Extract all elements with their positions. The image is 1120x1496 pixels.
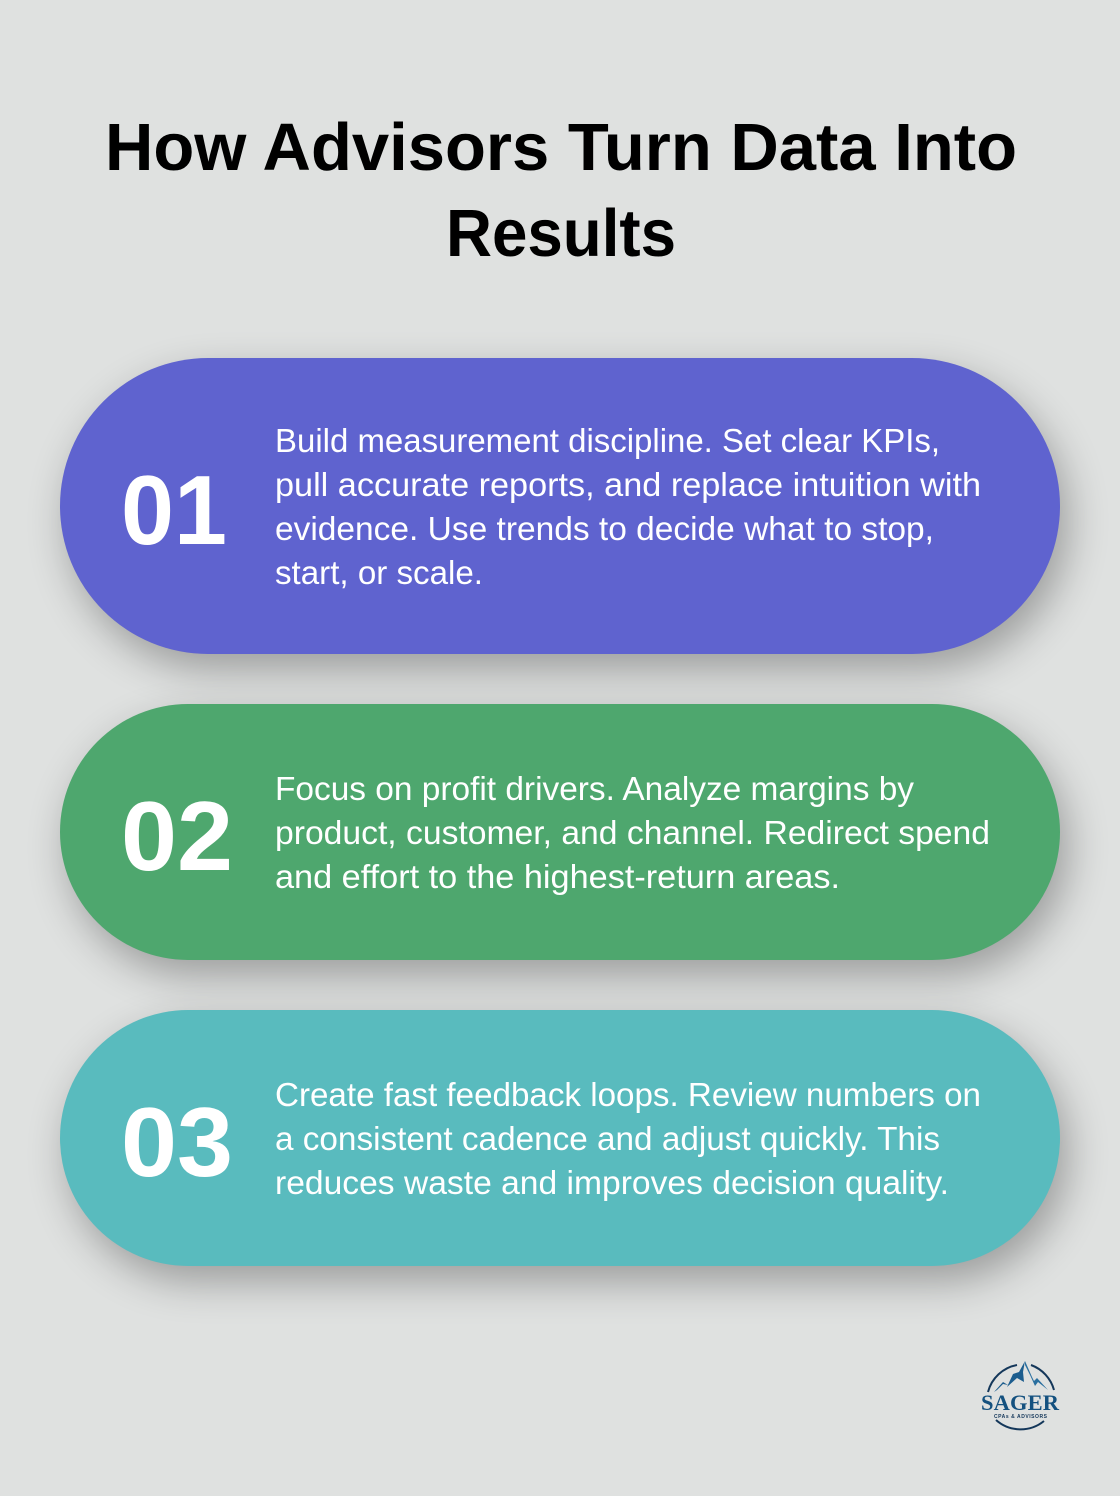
title bbox=[105, 111, 1017, 271]
logo ring arcs bbox=[988, 1365, 1054, 1429]
text: step 01 description: start, or scale. bbox=[275, 554, 483, 591]
panel: step 02 bbox=[60, 704, 1060, 960]
text: step 02 description: Focus on profit drivers. Analyze margins by bbox=[275, 770, 915, 807]
text: step 01 description bbox=[275, 422, 981, 591]
text: step 02 description: and effort to the highest-return areas. bbox=[275, 858, 840, 895]
logo wordmark: SAGER bbox=[981, 1390, 1060, 1415]
text: step 01 description: pull accurate reports, and replace intuition with bbox=[275, 466, 981, 503]
text: step 03 description bbox=[275, 1076, 981, 1201]
number 02: 02 bbox=[121, 781, 233, 891]
text: step 02 description: product, customer, and channel. Redirect spend bbox=[275, 814, 990, 851]
text: step 03 description: a consistent cadence and adjust quickly. This bbox=[275, 1120, 940, 1157]
number 03: 03 bbox=[121, 1087, 233, 1197]
title: Results bbox=[446, 197, 676, 271]
text: step 03 description: Create fast feedback loops. Review numbers on bbox=[275, 1076, 981, 1113]
text: step 02 description bbox=[275, 770, 990, 895]
text: step 01 description: evidence. Use trends to decide what to stop, bbox=[275, 510, 934, 547]
icon: Sager logo bbox=[981, 1361, 1060, 1430]
title: How Advisors Turn Data Into bbox=[105, 111, 1017, 185]
panel: step 03 bbox=[60, 1010, 1060, 1266]
number 01: 01 bbox=[121, 455, 227, 565]
logo mountains bbox=[994, 1361, 1048, 1392]
logo tagline: CPAs & ADVISORS bbox=[994, 1414, 1048, 1420]
text: step 03 description: reduces waste and improves decision quality. bbox=[275, 1164, 949, 1201]
panel: step 01 bbox=[60, 358, 1060, 654]
text: step 01 description: Build measurement discipline. Set clear KPIs, bbox=[275, 422, 940, 459]
